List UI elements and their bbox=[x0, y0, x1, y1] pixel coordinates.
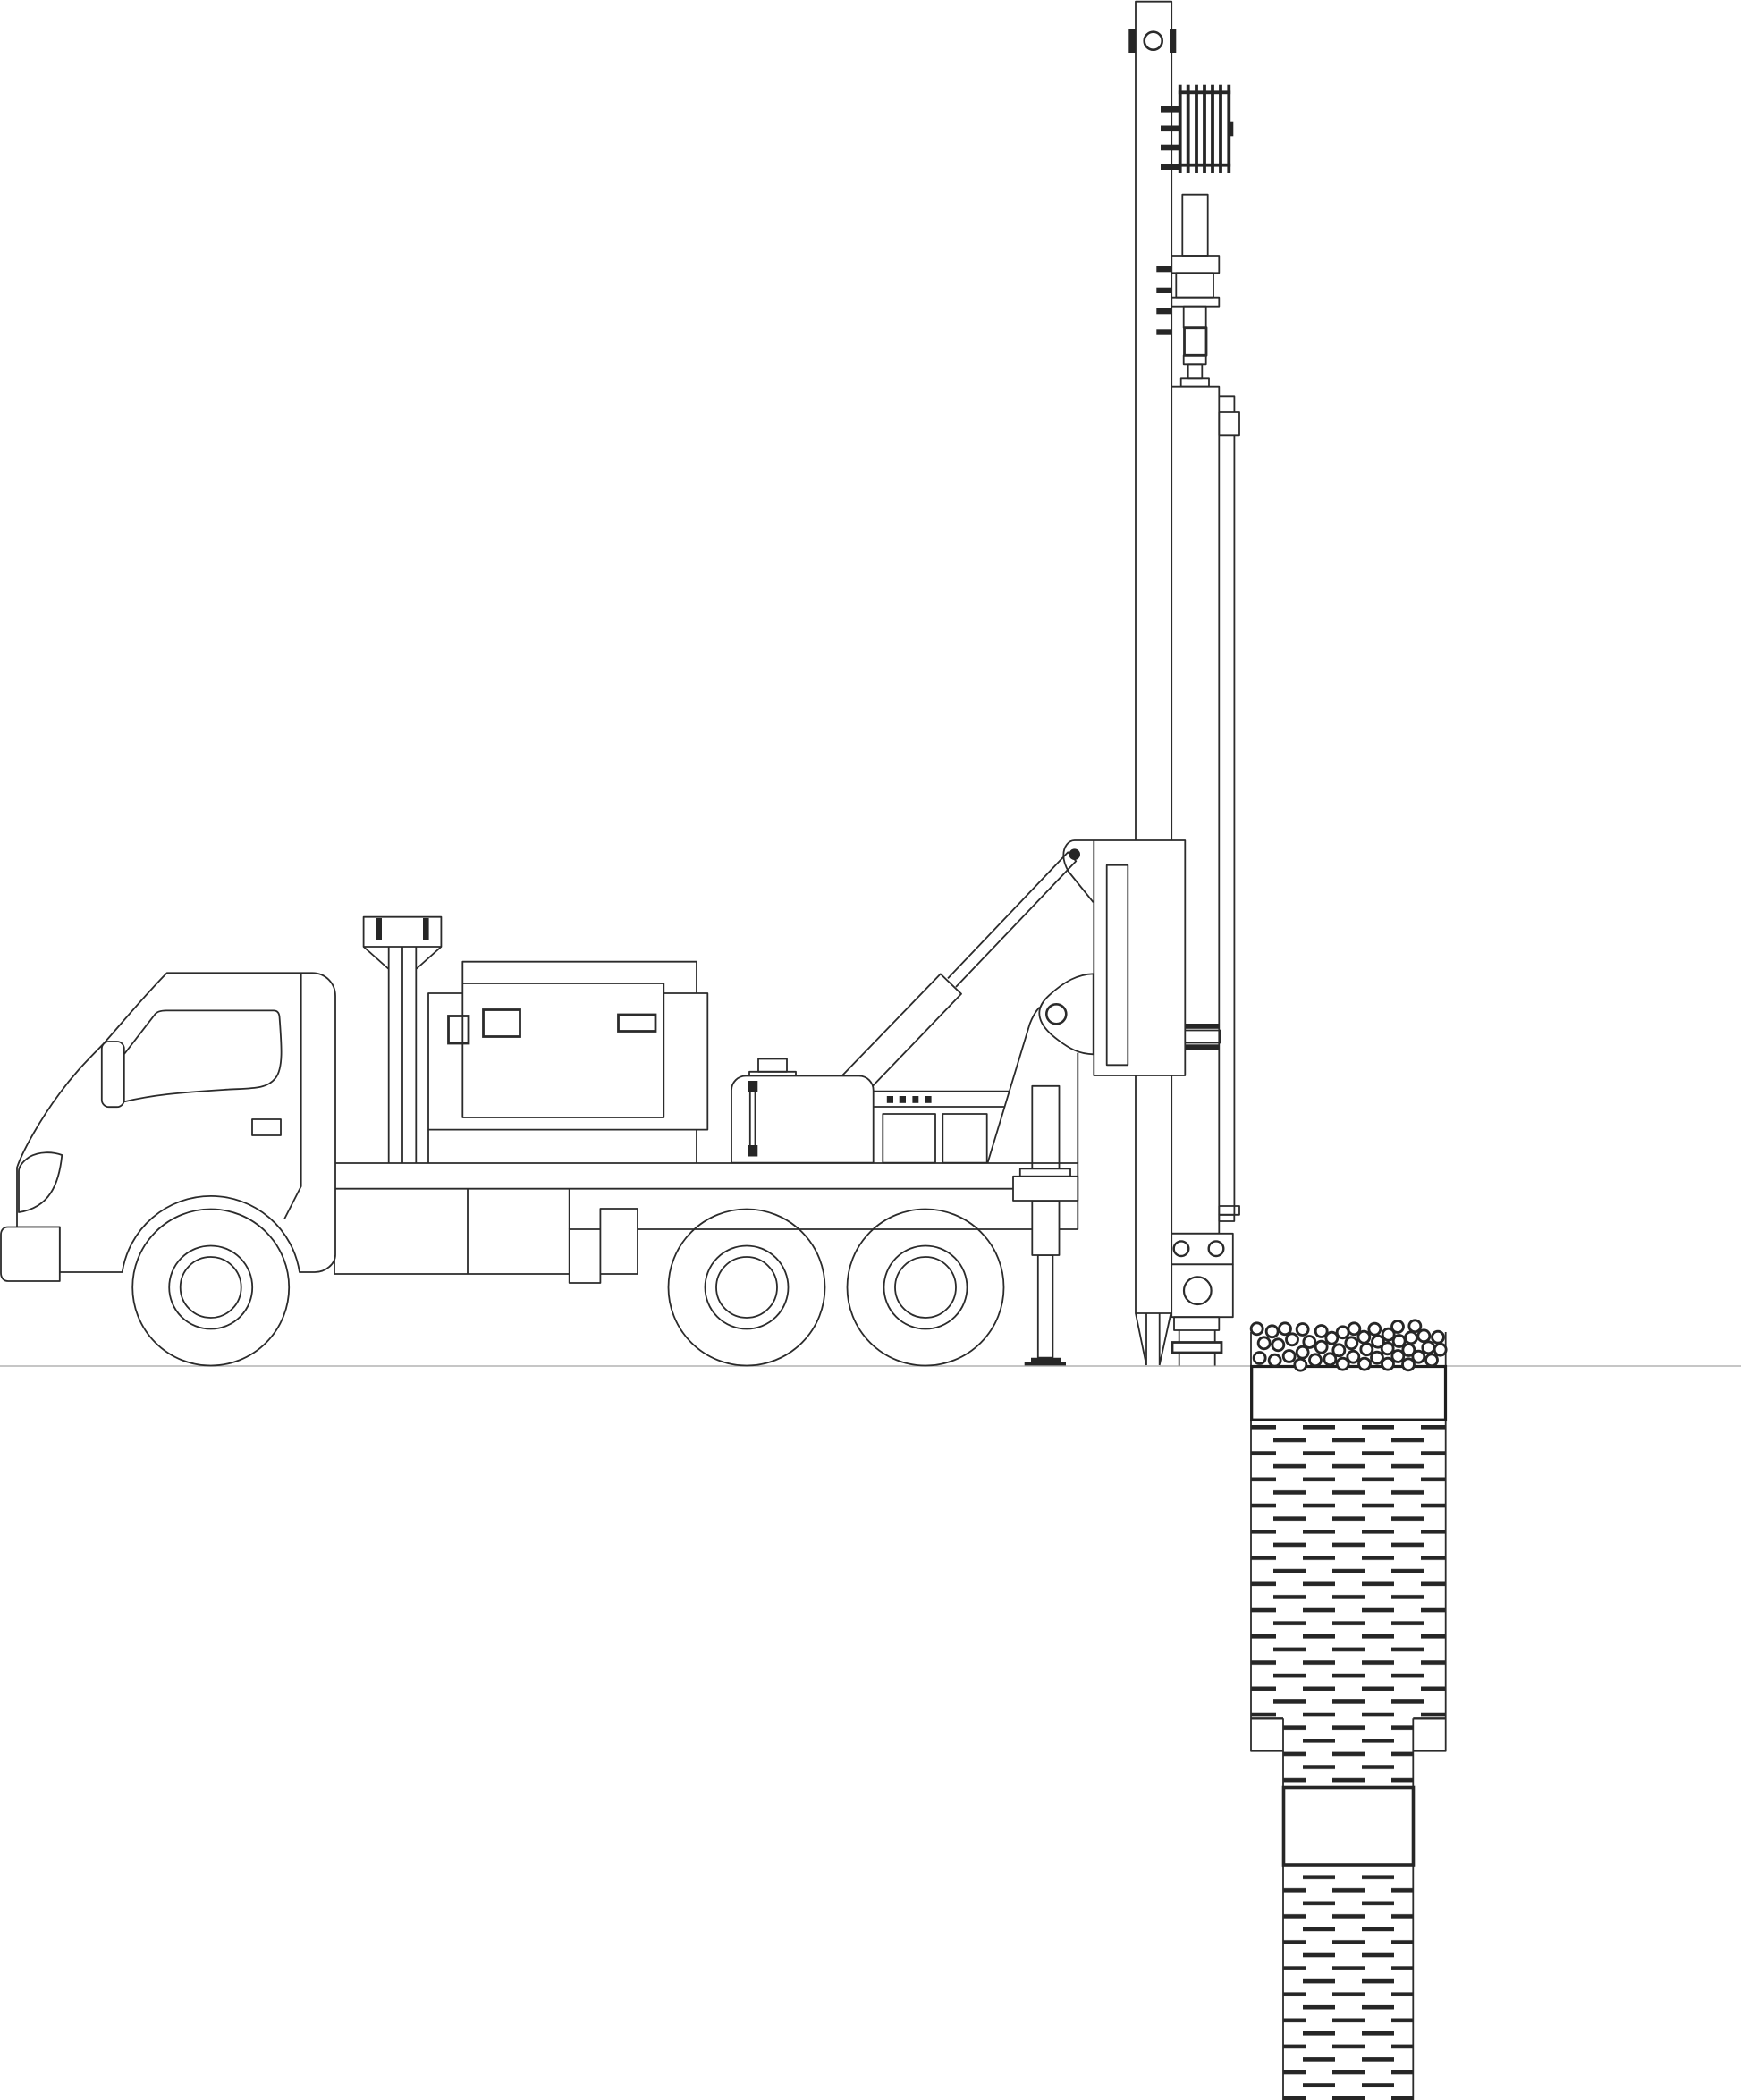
mast pivot plate bbox=[1039, 974, 1094, 1054]
cab window bbox=[124, 1010, 282, 1101]
rear wheel two bbox=[848, 1209, 1003, 1366]
rear wheel one bbox=[669, 1209, 824, 1366]
water layer lower bbox=[1283, 1868, 1413, 2100]
drill head assembly bbox=[1156, 195, 1219, 387]
gravel pile bbox=[1251, 1320, 1446, 1370]
control panel bbox=[875, 1092, 1009, 1163]
hydraulic tank bbox=[731, 1058, 874, 1163]
ground line bbox=[0, 1365, 1741, 1367]
water layer upper bbox=[1251, 1423, 1446, 1717]
main slide block bbox=[1094, 840, 1185, 1075]
front bumper bbox=[1, 1227, 60, 1281]
door handle bbox=[252, 1119, 281, 1135]
hoist coil bbox=[1161, 85, 1233, 173]
outrigger jack bbox=[1013, 1086, 1078, 1365]
mast pulley bbox=[1145, 32, 1162, 50]
generator vents bbox=[449, 1016, 469, 1043]
hydraulic lift cylinder bbox=[842, 852, 1076, 1086]
water layer narrowing bbox=[1283, 1717, 1413, 1786]
borehole walls bbox=[1251, 1332, 1446, 2100]
side mirror bbox=[102, 1042, 124, 1107]
drill base housing bbox=[1171, 1234, 1233, 1366]
cylinder bracket bbox=[1063, 840, 1094, 902]
drill column bbox=[1171, 387, 1239, 1234]
truck chassis and deck bbox=[334, 1053, 1078, 1283]
mast support strut bbox=[987, 1008, 1040, 1163]
front wheel bbox=[132, 1209, 289, 1366]
lower casing box bbox=[1284, 1788, 1413, 1865]
tank level gauge bbox=[750, 1092, 755, 1145]
generator unit bbox=[428, 962, 707, 1163]
exhaust stack bbox=[364, 917, 441, 1163]
mast tip bbox=[1136, 1313, 1171, 1365]
cab door line bbox=[284, 973, 301, 1219]
jack foot pad bbox=[1025, 1358, 1066, 1365]
side guide tube bbox=[1219, 396, 1234, 1215]
headlight bbox=[19, 1152, 62, 1212]
drill mast bbox=[1128, 2, 1176, 1365]
upper casing box bbox=[1252, 1366, 1445, 1420]
mast clamp bbox=[1185, 1024, 1220, 1050]
truck cab bbox=[1, 973, 335, 1281]
borehole bbox=[1251, 1332, 1446, 2100]
